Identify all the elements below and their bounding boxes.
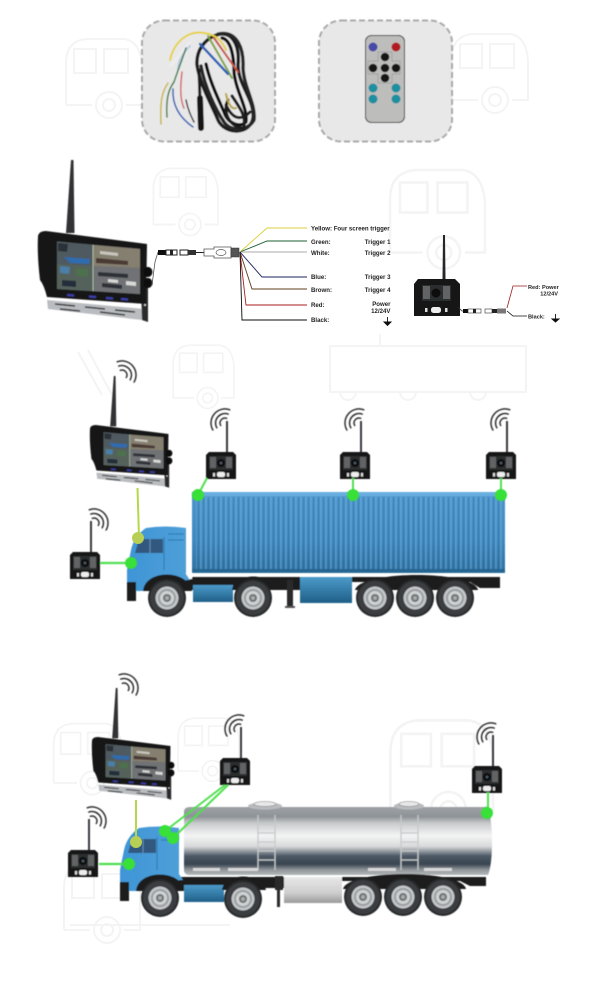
wire labels: Power — [372, 301, 391, 308]
camera wire labels: 12/24V — [540, 292, 558, 298]
wire labels: Yellow: Four screen trigger — [311, 226, 390, 232]
wire labels: Brown: — [311, 287, 332, 294]
wiring harness: connector and trigger wires — [152, 228, 307, 320]
wire labels: Black: — [311, 317, 329, 324]
wireless camera with wiring — [414, 235, 527, 316]
wire labels: Trigger 4 — [365, 287, 391, 294]
wire labels: Trigger 1 — [365, 239, 391, 246]
diagram: container truck — [70, 361, 516, 617]
wire labels: Green: — [311, 239, 331, 246]
container truck illustration — [127, 492, 505, 617]
camera: container middle — [340, 409, 370, 501]
connector: monitor to cab — [132, 488, 144, 544]
camera: front of cab — [68, 807, 135, 877]
camera: cab roof, two connections — [159, 715, 250, 844]
panel: cable accessory — [142, 20, 275, 142]
faint background vehicle line art — [54, 34, 528, 943]
connector: monitor to cab — [130, 800, 142, 848]
wire labels: 12/24V — [371, 308, 391, 315]
wire labels — [311, 226, 391, 326]
camera wire labels: Red: Power — [528, 285, 560, 291]
monitor, wireless signal — [90, 361, 172, 488]
tanker truck illustration — [120, 802, 492, 918]
diagram: tanker truck — [68, 674, 502, 918]
monitor with antenna — [38, 160, 152, 322]
camera wire labels — [528, 285, 560, 322]
camera: container front — [192, 409, 236, 501]
camera: container rear — [486, 409, 516, 501]
camera: tank rear — [472, 723, 502, 819]
camera: front of cab — [70, 509, 137, 579]
wire labels: Trigger 3 — [365, 274, 391, 281]
wire labels: Red: — [311, 302, 325, 309]
wire labels: Trigger 2 — [365, 250, 391, 257]
wire labels: Blue: — [311, 274, 326, 281]
icon: remote control — [366, 36, 404, 122]
camera wire labels: Black: — [528, 314, 545, 320]
panel: remote control accessory — [319, 20, 452, 142]
icon: coiled black cable — [161, 33, 254, 131]
monitor, wireless signal — [92, 674, 174, 800]
wire labels: White: — [311, 250, 330, 257]
